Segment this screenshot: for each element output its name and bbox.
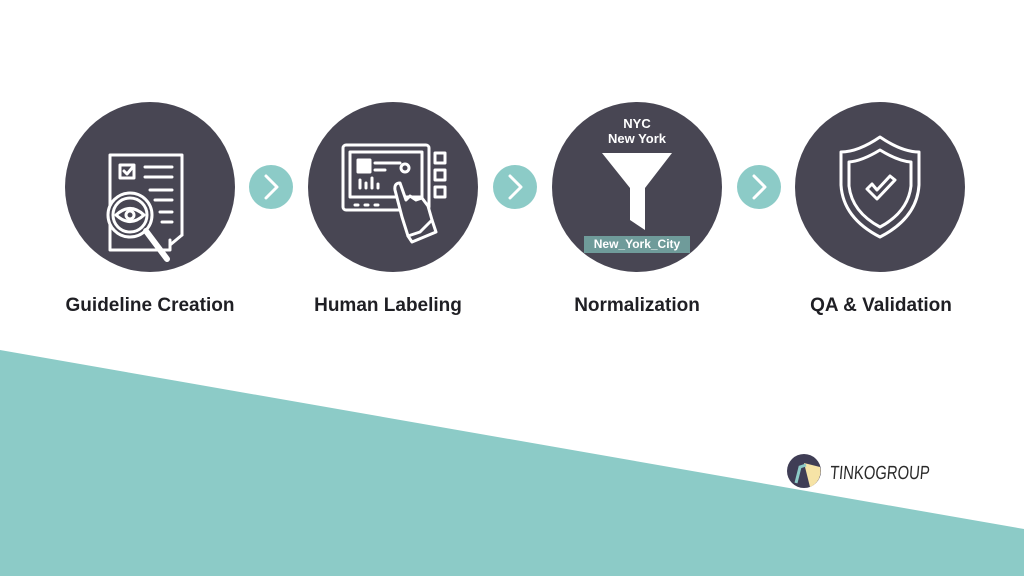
logo (787, 454, 931, 488)
step 4 circle: QA & validation (795, 102, 965, 272)
label: Normalization: Normalization (574, 295, 700, 316)
label: QA & Validation: QA & Validation (810, 295, 952, 316)
logo: TINKOGROUP (829, 463, 931, 484)
text: New_York_City (594, 237, 680, 251)
label: Human Labeling: Human Labeling (314, 295, 462, 316)
funnel texts (608, 116, 666, 146)
icon: document with magnifier (108, 155, 182, 259)
icon: shield with check (841, 137, 919, 237)
icon: tablet with hand (343, 145, 445, 242)
funnel tag box (584, 236, 690, 253)
label: Guideline Creation: Guideline Creation (66, 295, 234, 316)
funnel texts: New York (608, 131, 666, 146)
step 3 circle: normalization (552, 102, 722, 272)
step 2 circle: human labeling (308, 102, 478, 272)
step 1 circle: guideline creation (65, 102, 235, 272)
arrow 2 (493, 165, 537, 209)
arrow 1 (249, 165, 293, 209)
arrow 3 (737, 165, 781, 209)
icon: funnel (602, 153, 672, 230)
funnel texts: NYC (623, 116, 651, 131)
